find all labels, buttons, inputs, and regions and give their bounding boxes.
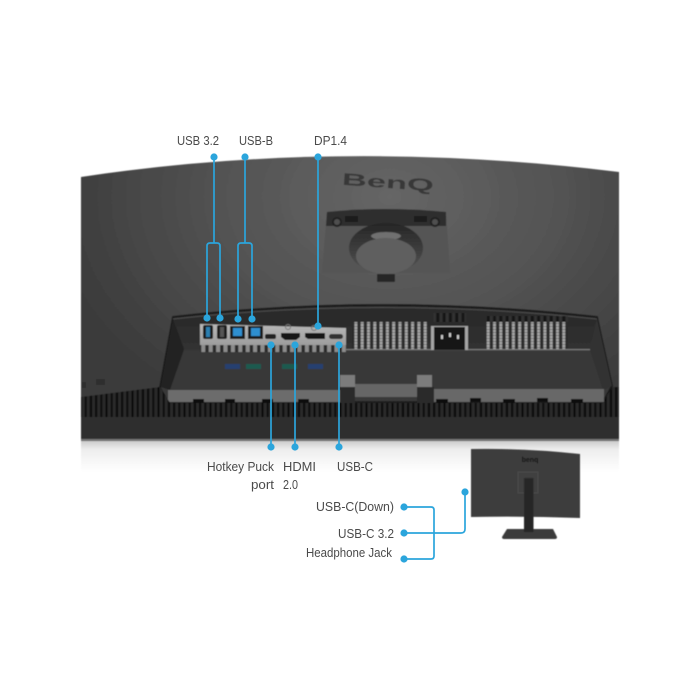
power socket [431, 326, 468, 350]
callout: Hotkey Puck port [207, 341, 275, 492]
callout: USB-C [335, 341, 373, 474]
stand neck [524, 478, 534, 532]
callout: Hotkey Puck port: port [251, 478, 275, 492]
callout: USB-B [234, 134, 273, 323]
port plate [200, 324, 346, 352]
hdmi port [281, 333, 300, 340]
callout: side ports: USB-C(Down) [316, 500, 394, 514]
reflection under monitor [81, 440, 619, 472]
side buttons [82, 379, 105, 388]
callout: Hotkey Puck port: Hotkey Puck [207, 460, 275, 474]
usb-b ports [230, 326, 245, 339]
cable ledge [168, 375, 604, 403]
VESA mount recess [322, 209, 450, 282]
coloured port labels [225, 364, 323, 369]
vent grille left [352, 322, 427, 349]
bottom vent band [81, 387, 619, 440]
upper slots [433, 313, 466, 322]
callout: side ports: Headphone Jack [306, 546, 393, 560]
usb 3.2 ports [203, 325, 213, 339]
callout: side ports [306, 488, 469, 563]
callout: HDMI 2.0 [283, 341, 316, 492]
callout: USB-B: USB-B [239, 134, 273, 148]
thumbnail logo: benq [522, 457, 538, 464]
vent grille right [486, 322, 568, 349]
callout: USB 3.2 [177, 134, 224, 322]
callout: USB-C: USB-C [337, 460, 373, 474]
callout: DP1.4: DP1.4 [314, 134, 347, 148]
stand base [502, 529, 557, 539]
callout: DP1.4 [314, 134, 347, 330]
screw holes [333, 218, 341, 226]
displayport [305, 333, 325, 339]
callout: USB 3.2: USB 3.2 [177, 134, 219, 148]
monitor rear photo [81, 156, 619, 472]
hotkey puck port [265, 334, 276, 339]
stand socket [349, 223, 423, 273]
monitor back shell [81, 156, 619, 441]
floor of recess [170, 350, 603, 390]
BenQ logo: BenQ [341, 170, 434, 195]
callout: HDMI 2.0: 2.0 [283, 478, 298, 492]
small monitor thumbnail [471, 449, 580, 539]
thumbnail shell [471, 449, 580, 518]
callout: side ports: USB-C 3.2 [338, 527, 394, 541]
usb-c port [329, 334, 343, 339]
callout: HDMI 2.0: HDMI [283, 460, 316, 474]
neck plate [518, 472, 538, 493]
connector recess [160, 305, 612, 403]
